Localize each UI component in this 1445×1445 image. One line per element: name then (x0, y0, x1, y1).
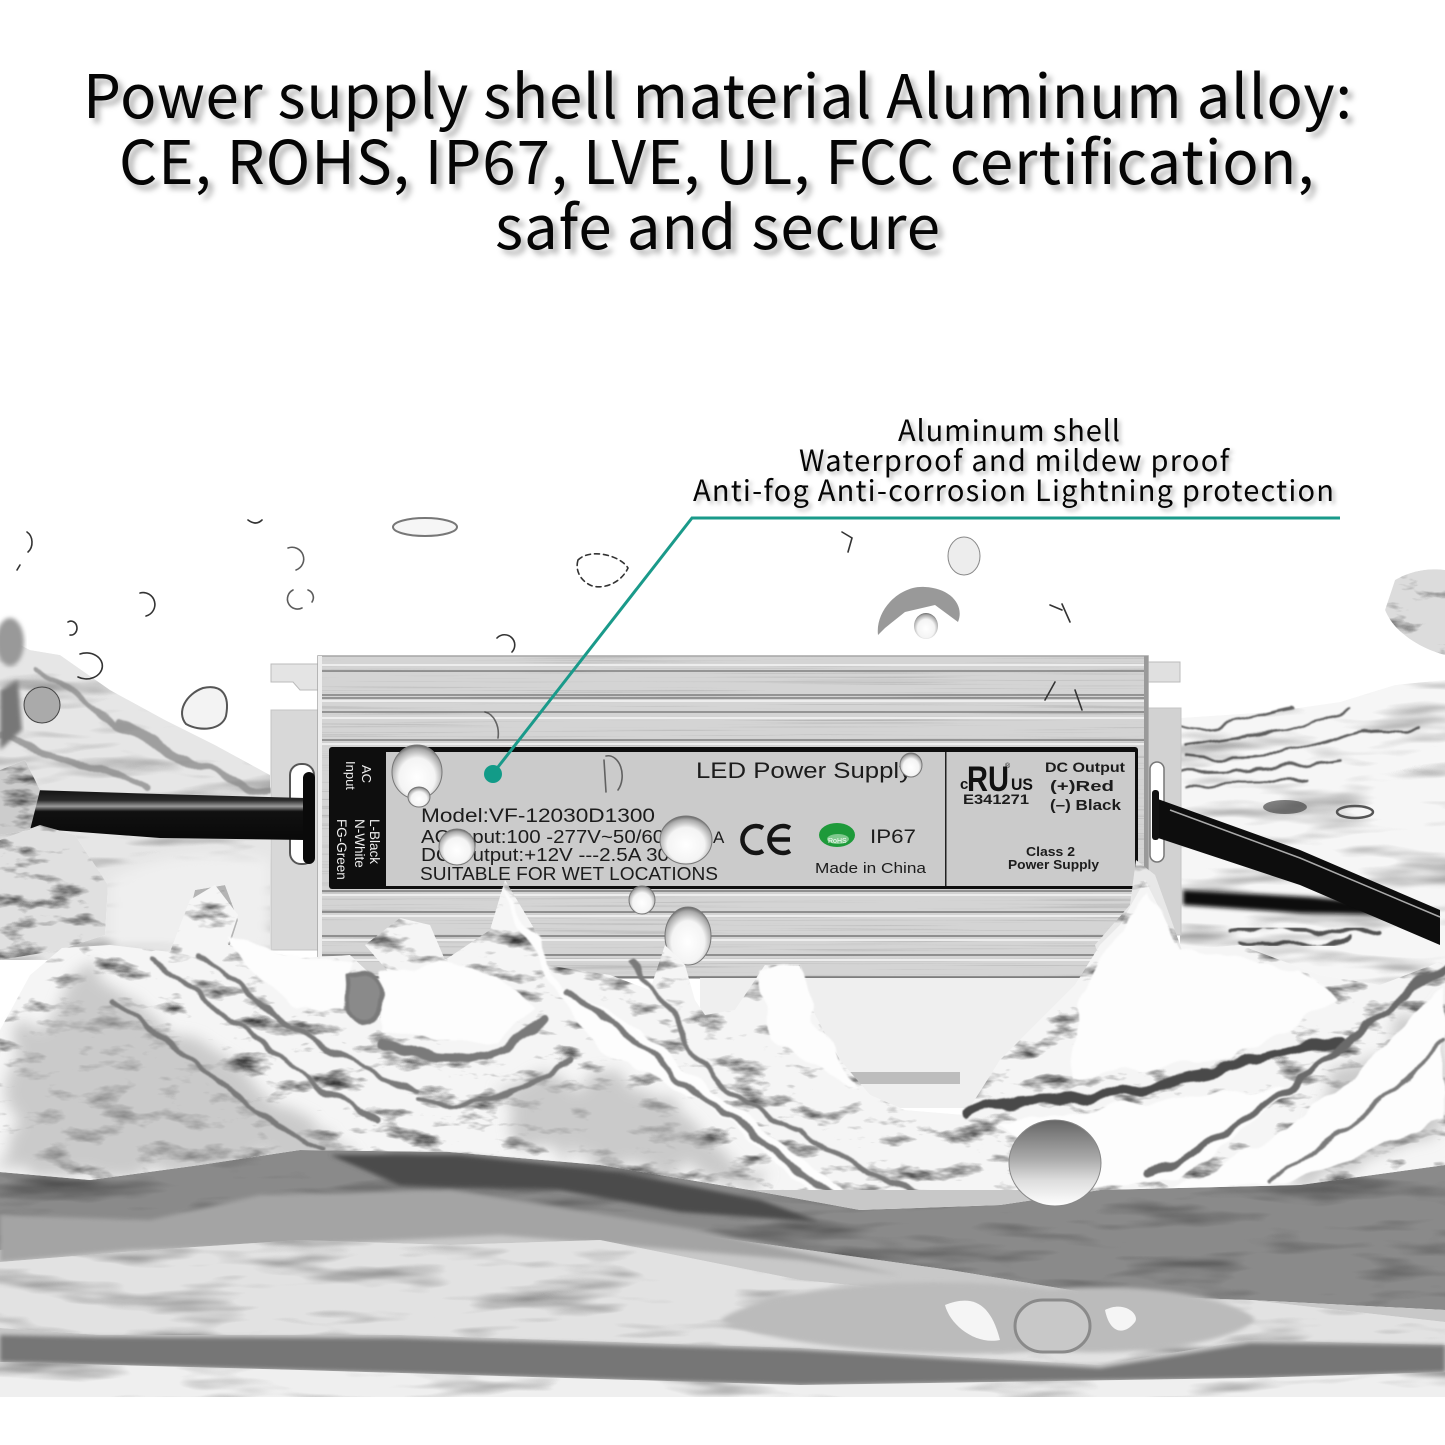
mid-tone ripple patches (0, 970, 1445, 1185)
DC output legend (1045, 759, 1125, 814)
lower water: reflection (720, 1282, 1255, 1354)
DC output legend: DC Output (1045, 759, 1125, 775)
droplets in the air (0, 518, 1082, 729)
water bulb (1009, 1120, 1101, 1206)
icon: UL mark: RU (967, 760, 1009, 799)
title (83, 49, 1352, 267)
title: CE, ROHS, IP67, LVE, UL, FCC certification, (119, 115, 1314, 202)
water blob top right (1385, 569, 1445, 655)
title: safe and secure (495, 180, 940, 267)
product label (329, 747, 1138, 889)
wire colour text: N-White (352, 819, 367, 868)
wire colour text: FG-Green (334, 819, 349, 880)
wire colour text (334, 819, 382, 880)
left cable (0, 789, 305, 840)
lower water: base (0, 1190, 1445, 1397)
callout anchor dot (484, 765, 502, 783)
callout text: Aluminum shell (898, 408, 1120, 450)
lower water: light pool (0, 1240, 1445, 1365)
wire colour text: L-Black (367, 819, 382, 864)
lower water: dark band (0, 1150, 1445, 1310)
DC output rating: DC Output:+12V ---2.5A 30 (421, 845, 669, 865)
icon: UL mark (960, 760, 1033, 799)
DC output legend: (+)Red (1050, 778, 1114, 795)
icon: RoHS badge (819, 823, 855, 847)
callout text: Anti-fog Anti-corrosion Lightning protection (693, 468, 1334, 510)
icon: UL mark: US (1011, 775, 1033, 794)
AC input text (343, 761, 374, 790)
white water highlights (230, 885, 1445, 1200)
model: Model:VF-12030D1300 (421, 806, 655, 827)
icon: UL mark: ® (1005, 762, 1011, 770)
right mounting flange (1148, 662, 1181, 935)
icon: RoHS badge: RoHS (828, 838, 847, 845)
wet locations: SUITABLE FOR WET LOCATIONS (420, 864, 718, 884)
background water: left wave (0, 635, 270, 960)
class 2 note: Power Supply (1008, 858, 1099, 872)
aluminium body (318, 656, 1148, 978)
grey ripple bands (110, 955, 1445, 1220)
UL number: E341271 (963, 791, 1029, 807)
AC input text: AC (359, 765, 374, 783)
class 2 note: Class 2 (1026, 845, 1075, 859)
background water: right wave (1180, 680, 1445, 1010)
left foreground water around cable (0, 760, 238, 960)
droplets on the housing (392, 712, 922, 965)
icon: CE mark (742, 826, 790, 853)
callout text: Waterproof and mildew proof (799, 438, 1231, 480)
power supply housing (0, 656, 1181, 978)
lower water: foreground lip (0, 1362, 1445, 1397)
lower water: mid-grey band (0, 1190, 900, 1275)
AC input rating: A (713, 828, 725, 847)
callout text (693, 408, 1334, 510)
icon: UL mark: c (960, 776, 968, 793)
IP67: IP67 (870, 827, 916, 848)
AC input text: Input (343, 761, 358, 790)
made in china: Made in China (815, 861, 927, 877)
lower water: bottom dark band (0, 1335, 1445, 1385)
DC output legend: (–) Black (1050, 797, 1122, 814)
left mounting flange (271, 664, 318, 950)
callout leader line (484, 518, 1340, 783)
lower water: darkest area (330, 1155, 820, 1222)
AC input rating: AC Input:100 -277V~50/60H (421, 827, 679, 847)
main splash (0, 880, 1445, 1220)
class 2 note (1008, 845, 1099, 872)
cable gland left (303, 772, 315, 864)
right cable (1152, 790, 1440, 945)
title: Power supply shell material Aluminum alloy: (83, 49, 1352, 136)
pale backdrop beneath housing (700, 978, 1120, 1108)
heading: LED Power Supply: LED Power Supply (696, 758, 912, 783)
right splash over flange (1095, 860, 1182, 990)
